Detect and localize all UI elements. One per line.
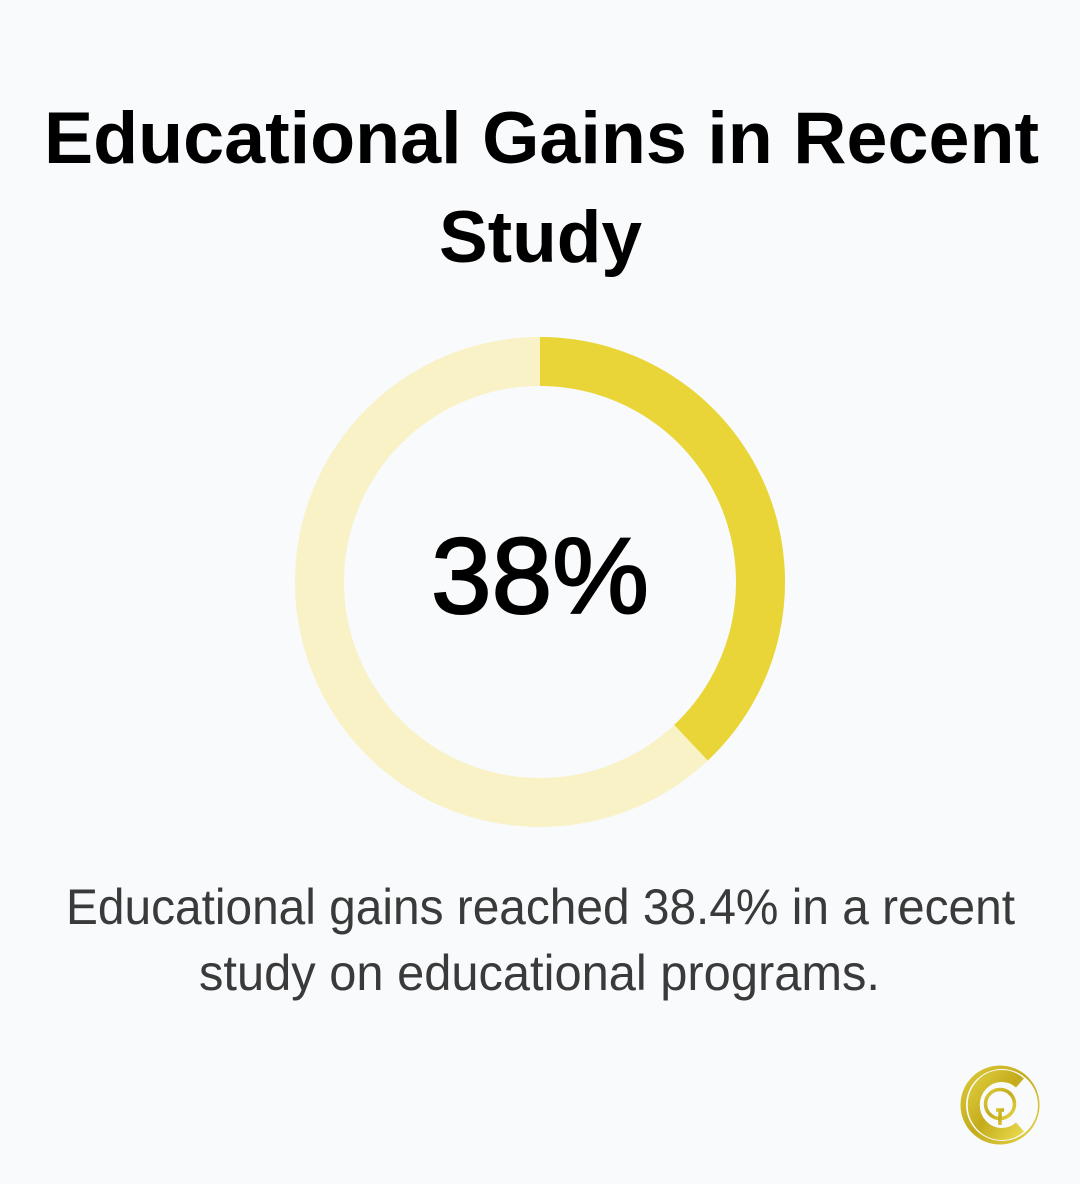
donut track <box>320 362 760 802</box>
donut value arc <box>540 362 761 743</box>
description text: study on educational programs. <box>199 945 880 1001</box>
title: Study <box>439 197 642 278</box>
icon: gold CQ logo <box>960 1066 1040 1144</box>
title: Educational Gains in Recent <box>44 98 1039 179</box>
title <box>44 98 1039 278</box>
donut chart: 38% <box>320 362 761 802</box>
center value: 38% <box>431 515 649 636</box>
description text: Educational gains reached 38.4% in a recent <box>66 879 1015 935</box>
description text <box>66 879 1015 1001</box>
